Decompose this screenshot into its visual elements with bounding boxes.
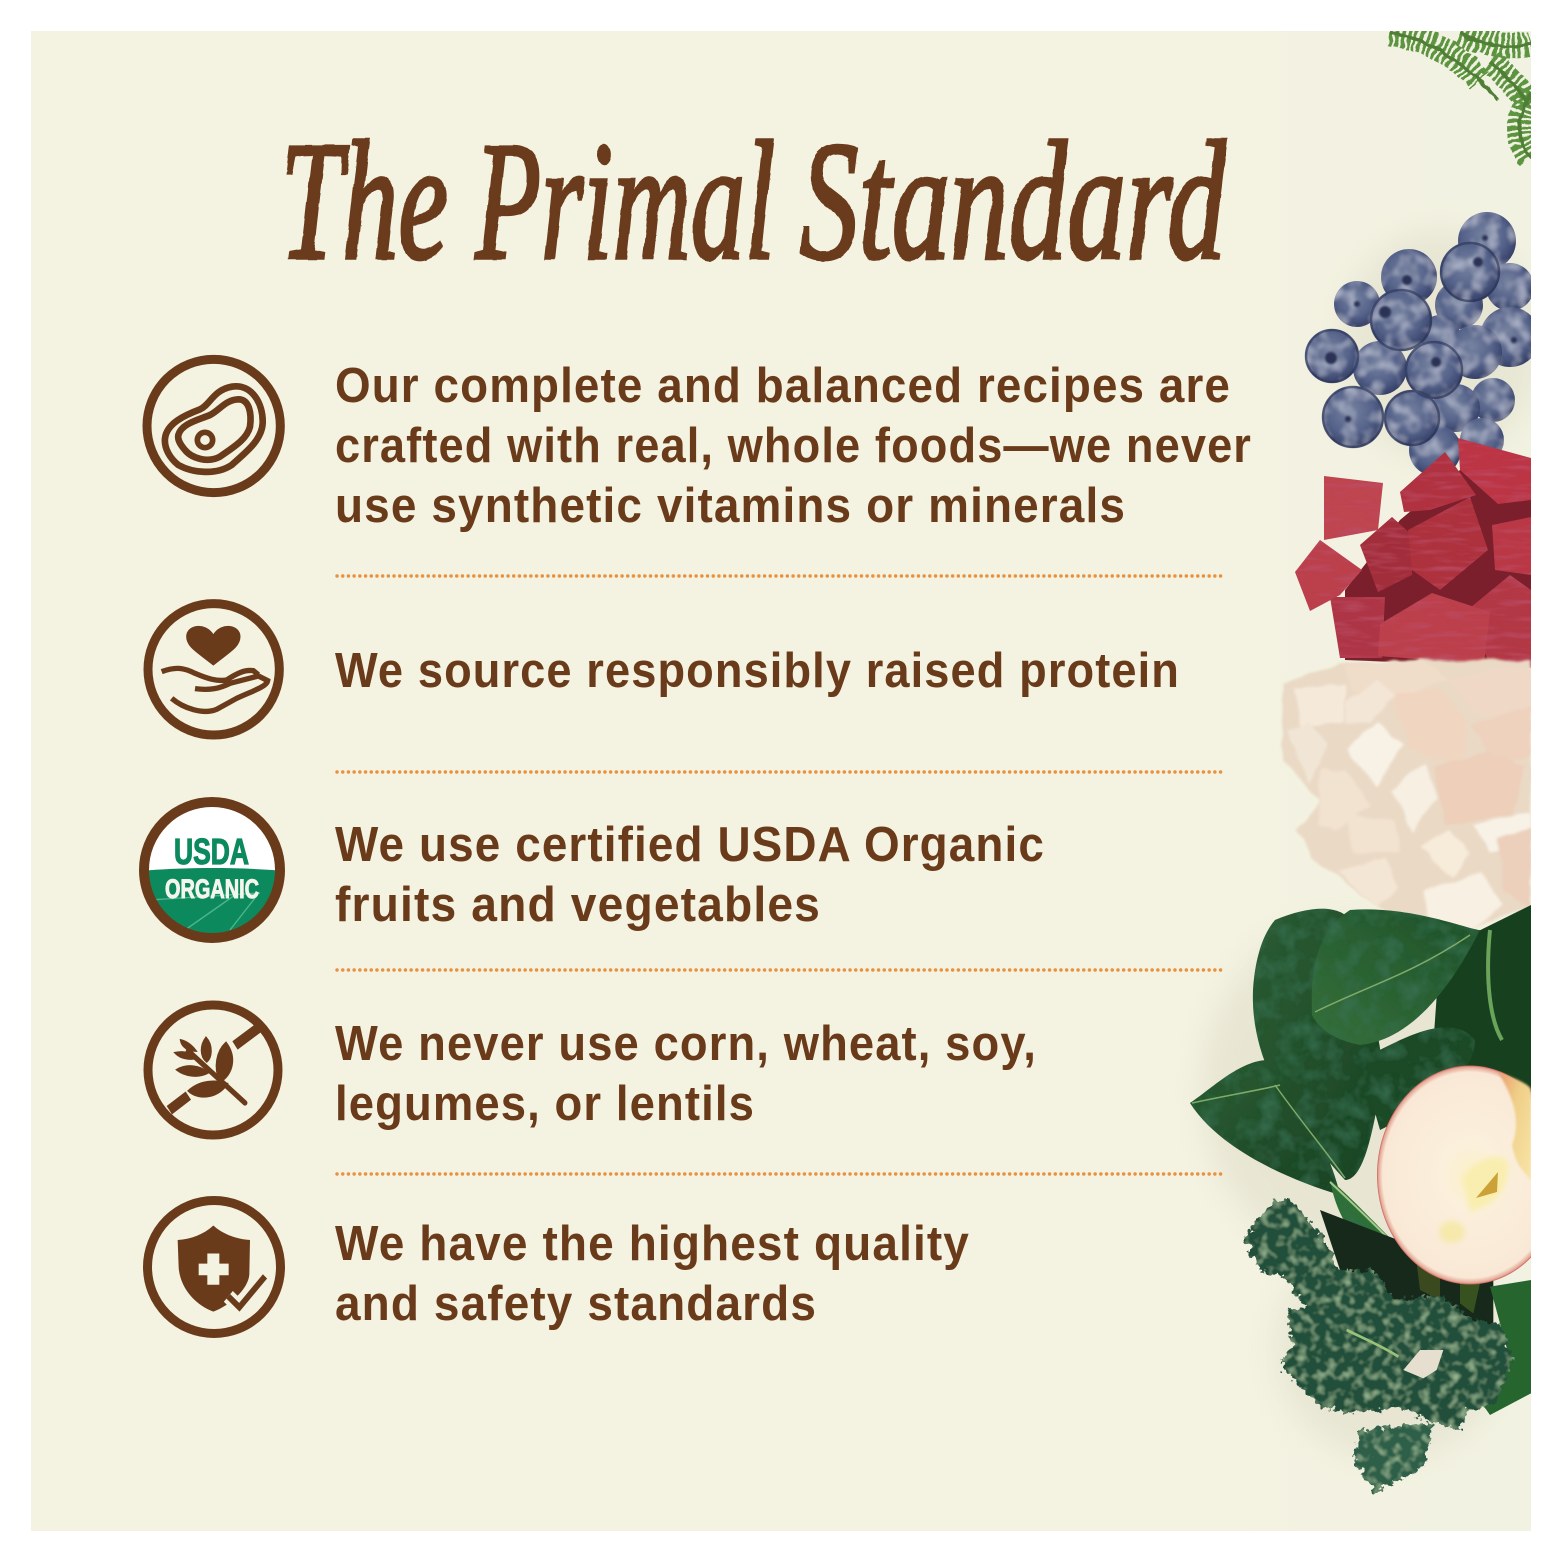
icon: USDA organic seal: USDA: [174, 831, 249, 872]
text: item 4: legumes, or lentils: [335, 1077, 755, 1131]
item 5: quality and safety: [148, 1200, 970, 1334]
text: item 1: crafted with real, whole foods—we never: [335, 419, 1252, 473]
food photo column: [1190, 33, 1563, 1493]
kale: [1243, 1200, 1531, 1493]
title: Standard: [800, 107, 1227, 295]
title: Primal: [474, 107, 775, 295]
text: item 4: We never use corn, wheat, soy,: [335, 1017, 1037, 1071]
text: item 2: We source responsibly raised protein: [335, 644, 1180, 698]
text: item 5: We have the highest quality: [335, 1217, 970, 1271]
text: item 1: Our complete and balanced recipes are: [335, 359, 1231, 413]
soft shadow under food: [1200, 230, 1540, 1460]
text: item 5: and safety standards: [335, 1277, 817, 1331]
title: The: [280, 107, 448, 295]
title: [280, 107, 1227, 295]
carrot greens: [1390, 33, 1531, 158]
icon: hand with heart: [148, 604, 279, 735]
icon: crossed-out grain: [148, 1005, 278, 1135]
item 3: USDA organic: [140, 802, 1045, 940]
berry edge shading: [1306, 243, 1499, 447]
icon: shield with check: [148, 1200, 280, 1334]
item 4: no corn wheat soy: [148, 1005, 1037, 1135]
text: item 1: [335, 359, 1252, 533]
text: item 3: We use certified USDA Organic: [335, 818, 1045, 872]
blueberries: [1305, 212, 1540, 476]
text: item 1: use synthetic vitamins or minerals: [335, 479, 1126, 533]
icon: steak: [147, 359, 280, 493]
diced beef: [1295, 438, 1531, 668]
item 2: responsibly raised protein: [148, 604, 1180, 735]
text: item 5: [335, 1217, 970, 1331]
icon: USDA organic seal: ORGANIC: [165, 874, 259, 904]
spinach leaves: [1190, 905, 1531, 1262]
text: item 3: [335, 818, 1045, 932]
diced chicken: [1283, 660, 1531, 942]
item 1: whole foods: [147, 359, 1252, 533]
icon: USDA organic seal: [140, 802, 285, 940]
apple half: [1377, 1066, 1531, 1284]
text: item 3: fruits and vegetables: [335, 878, 821, 932]
text: item 4: [335, 1017, 1037, 1131]
